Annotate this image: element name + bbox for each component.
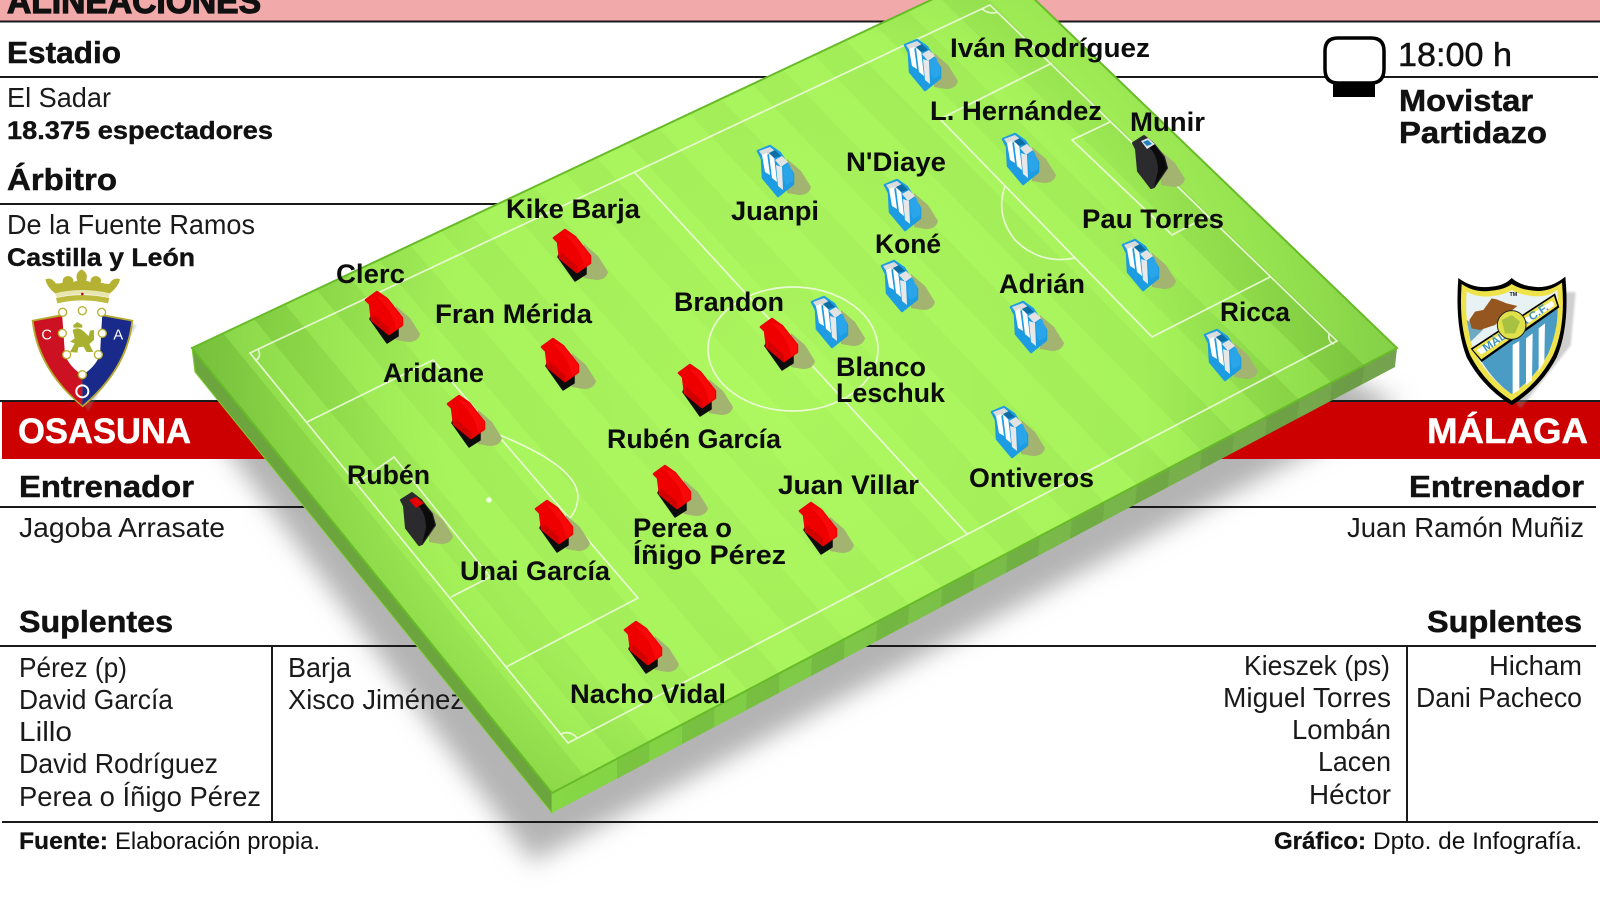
- player: Nacho Vidal: [625, 622, 679, 673]
- heading: coach: Entrenador: [1409, 469, 1584, 504]
- shield letters: C: [41, 327, 52, 343]
- pitch shadow: [205, 100, 1400, 862]
- graphic credit: [1274, 828, 1582, 855]
- referee region: Castilla y León: [7, 244, 195, 272]
- substitutes list 1: Kieszek (ps): [1244, 650, 1390, 681]
- name: Unai García: Unai García: [460, 556, 611, 586]
- player: Fran Mérida: [542, 339, 596, 390]
- crest: Málaga: TM: [1509, 292, 1518, 298]
- substitutes list 2: Xisco Jiménez: [288, 684, 464, 715]
- player names: [336, 33, 1291, 709]
- player: Rubén García: [679, 365, 733, 416]
- crest: Osasuna: A: [113, 327, 123, 343]
- player: Pau Torres: [1123, 240, 1176, 290]
- players: Málaga: [758, 40, 1258, 457]
- team name: Osasuna: OSASUNA: [18, 412, 191, 451]
- name: Perea o Íñigo Pérez: [633, 513, 786, 570]
- player: N'Diaye: [885, 180, 938, 230]
- name: Perea o Íñigo Pérez: Íñigo Pérez: [633, 539, 786, 570]
- name: Pau Torres: Pau Torres: [1082, 204, 1224, 234]
- name: Ontiveros: Ontiveros: [969, 463, 1094, 493]
- name: Blanco Leschuk: [836, 352, 946, 408]
- icon: television: [1325, 38, 1384, 97]
- goalkeeper: Rubén: [401, 493, 453, 545]
- name: Aridane: Aridane: [383, 358, 484, 388]
- player: Unai García: [536, 501, 590, 552]
- substitutes list 2: [1416, 650, 1582, 713]
- player: Koné: [882, 261, 935, 311]
- ball: [1497, 311, 1526, 339]
- source credit: [19, 828, 320, 855]
- crest: Osasuna: [32, 269, 137, 411]
- crown: [45, 269, 120, 303]
- pitch markings: [250, 5, 1337, 743]
- name: Brandon: Brandon: [674, 287, 784, 317]
- name: L. Hernández: L. Hernández: [930, 96, 1102, 126]
- heading: stadium: Estadio: [7, 35, 121, 70]
- goalkeeper: Munir: [1133, 136, 1185, 188]
- coach name: Jagoba Arrasate: [19, 512, 225, 543]
- panel: Osasuna staff and substitutes: [0, 469, 1596, 822]
- heading: referee: Árbitro: [7, 162, 117, 197]
- name: Blanco Leschuk: Leschuk: [836, 378, 946, 408]
- coach name: Juan Ramón Muñiz: [1347, 512, 1584, 543]
- shield outline: [1457, 277, 1567, 405]
- name: Rubén: Rubén: [347, 460, 430, 490]
- blue field and stripes: [1482, 303, 1558, 394]
- substitutes list 2: Barja: [288, 652, 351, 683]
- graphic credit: Gráfico:: [1274, 828, 1366, 855]
- substitutes list 2: Dani Pacheco: [1416, 682, 1582, 713]
- name: Adrián: Adrián: [999, 269, 1085, 299]
- broadcaster: Partidazo: [1399, 115, 1547, 150]
- name: Iván Rodríguez: Iván Rodríguez: [950, 33, 1150, 63]
- substitutes list 1: Lacen: [1318, 746, 1391, 777]
- name: Rubén García: Rubén García: [607, 424, 782, 454]
- lion: [70, 328, 94, 353]
- player: Adrián: [1011, 302, 1064, 352]
- players: Osasuna: [366, 230, 854, 673]
- header bar: [0, 0, 1600, 22]
- name: Clerc: Clerc: [336, 259, 405, 289]
- substitutes list 1: Lombán: [1292, 714, 1391, 745]
- name: Ricca: Ricca: [1220, 297, 1291, 327]
- substitutes list 1: Perea o Íñigo Pérez: [19, 781, 261, 812]
- substitutes list 1: Héctor: [1309, 779, 1391, 810]
- kick-off time: 18:00 h: [1398, 36, 1512, 73]
- name: Blanco Leschuk: Blanco: [836, 352, 926, 382]
- playing surface: [192, 0, 1397, 793]
- player: Juan Villar: [800, 503, 854, 554]
- name: N'Diaye: N'Diaye: [846, 147, 946, 177]
- football pitch: [192, 0, 1397, 813]
- player: Aridane: [448, 396, 502, 447]
- substitutes list 1: Pérez (p): [19, 652, 127, 683]
- name: Kike Barja: Kike Barja: [506, 194, 641, 224]
- mowing stripes: [192, 0, 1364, 793]
- heading: substitutes: Suplentes: [19, 604, 173, 639]
- crest: Málaga: [1457, 277, 1576, 409]
- team band: [0, 401, 1600, 459]
- player: Juanpi: [758, 146, 811, 196]
- name: Nacho Vidal: Nacho Vidal: [570, 679, 726, 709]
- player: Brandon: [761, 319, 815, 370]
- substitutes list 1: [19, 652, 261, 812]
- player: Ontiveros: [992, 407, 1045, 457]
- castle: [1469, 298, 1517, 330]
- substitutes list 1: David García: [19, 684, 173, 715]
- player: Ricca: [1205, 330, 1258, 380]
- player: Blanco Leschuk: [812, 297, 865, 347]
- shield: [32, 314, 133, 407]
- crest lettering: MÁLAGA C.F.: [1480, 301, 1551, 354]
- diagonal band: [1471, 293, 1559, 362]
- player: Perea o Íñigo Pérez: [654, 466, 708, 517]
- side face: front: [552, 348, 1397, 813]
- stadium name: El Sadar: [7, 82, 111, 113]
- name: Fran Mérida: Fran Mérida: [435, 299, 593, 329]
- heading: substitutes: Suplentes: [1427, 604, 1582, 639]
- player: Kike Barja: [554, 230, 608, 281]
- player: Iván Rodríguez: [905, 40, 958, 90]
- beads: [58, 307, 106, 379]
- name: Juanpi: Juanpi: [731, 196, 819, 226]
- broadcaster: [1399, 83, 1547, 150]
- substitutes list 1: David Rodríguez: [19, 748, 218, 779]
- graphic credit: Dpto. de Infografía.: [1373, 828, 1582, 855]
- side face: left: [192, 348, 552, 813]
- name: Koné: Koné: [875, 229, 941, 259]
- source credit: Fuente:: [19, 828, 108, 855]
- player: L. Hernández: [1003, 134, 1056, 184]
- substitutes list 1: Miguel Torres: [1223, 682, 1391, 713]
- player: Clerc: [366, 292, 420, 343]
- source credit: Elaboración propia.: [115, 828, 320, 855]
- panel: match info: [0, 35, 1598, 272]
- broadcaster: Movistar: [1399, 83, 1533, 118]
- name: Perea o Íñigo Pérez: Perea o: [633, 513, 732, 543]
- substitutes list 1: Lillo: [19, 716, 72, 747]
- heading: coach: Entrenador: [19, 469, 194, 504]
- name: Juan Villar: Juan Villar: [778, 470, 919, 500]
- team name: Málaga: MÁLAGA: [1427, 411, 1588, 451]
- substitutes list 2: Hicham: [1489, 650, 1582, 681]
- capacity: 18.375 espectadores: [7, 117, 273, 145]
- referee name: De la Fuente Ramos: [7, 209, 255, 240]
- panel: Málaga staff and substitutes: [1100, 469, 1596, 822]
- name: Munir: Munir: [1130, 107, 1205, 137]
- substitutes list 1: [1223, 650, 1391, 810]
- substitutes list 2: [288, 652, 464, 715]
